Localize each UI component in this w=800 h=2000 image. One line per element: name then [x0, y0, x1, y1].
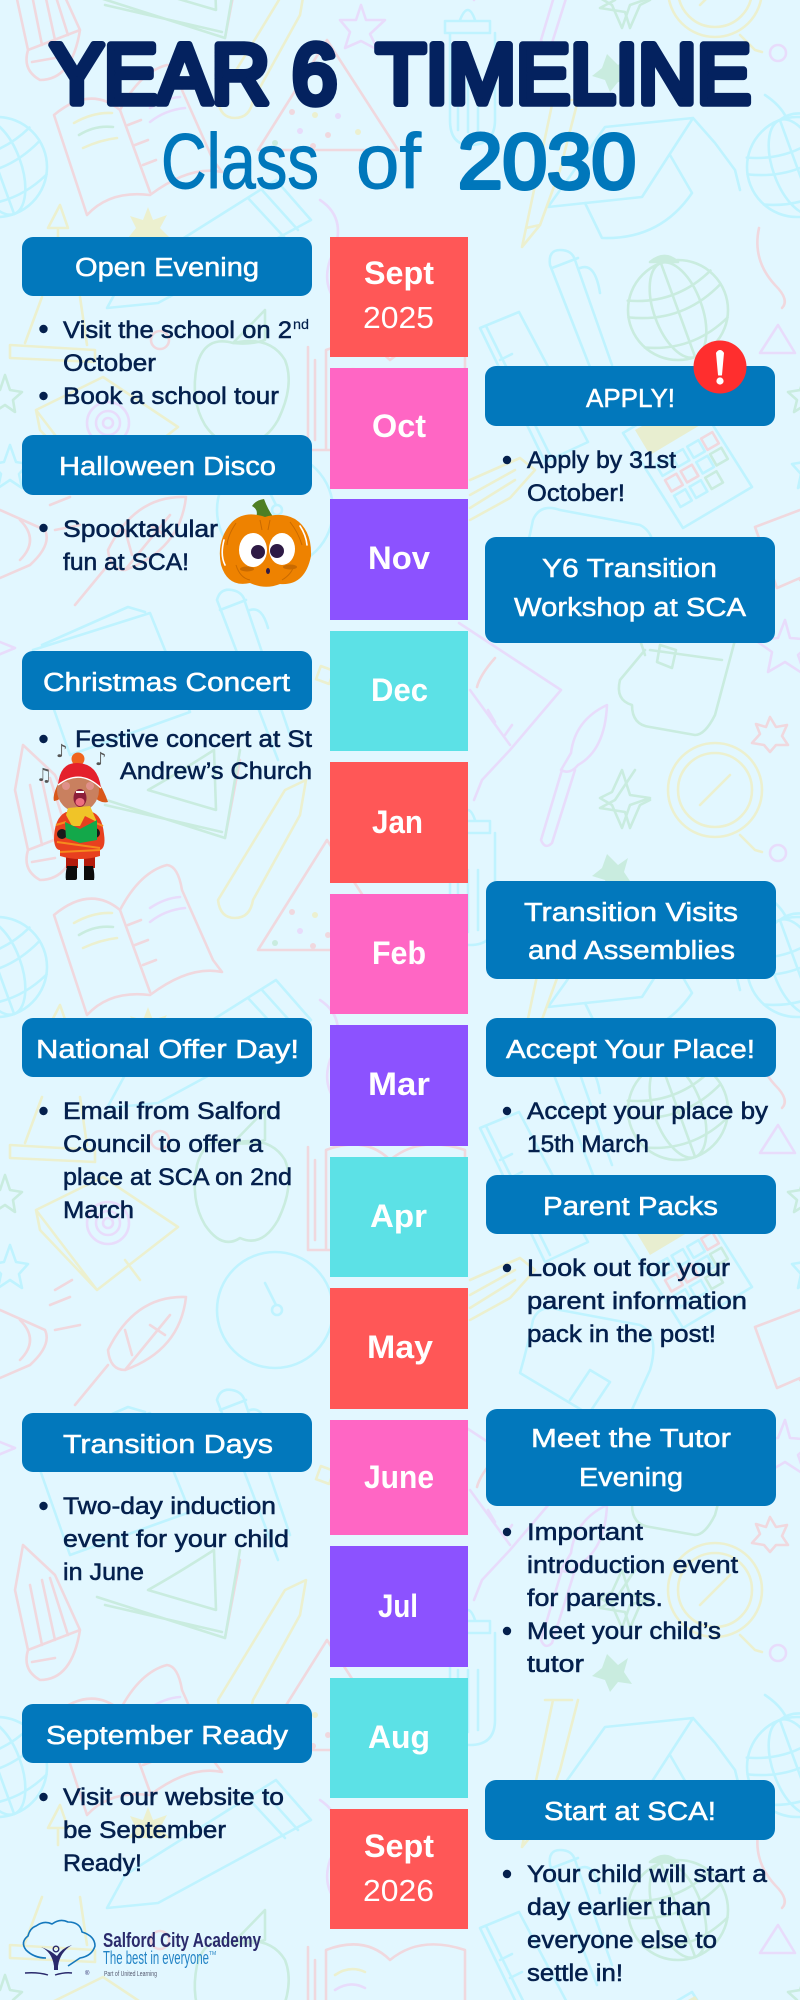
logo: Salford City Academy — [23, 1920, 262, 1978]
panel: start at sca: everyone else to — [527, 1927, 717, 1954]
panel: transition days: in June — [63, 1559, 144, 1586]
month: Apr — [330, 1157, 468, 1277]
month: Sept 2025: 2025 — [363, 300, 434, 335]
panel: meet the tutor evening: Meet the Tutor — [531, 1425, 732, 1453]
panel: open evening: October — [63, 350, 156, 377]
month: Mar — [330, 1025, 468, 1146]
logo: Salford City Academy: ® — [85, 1970, 90, 1977]
panel: start at sca: Start at SCA! — [544, 1798, 716, 1826]
month: Nov: Nov — [368, 540, 430, 576]
panel: parent packs: Parent Packs — [543, 1193, 718, 1221]
month: Sept 2025 — [330, 237, 468, 357]
panel: transition days: Two-day induction — [63, 1493, 276, 1520]
panel: transition visits — [486, 881, 776, 979]
panel: meet the tutor evening: introduction event — [527, 1552, 738, 1579]
month: Feb: Feb — [372, 935, 426, 971]
panel: christmas concert: Andrew’s Church — [120, 758, 312, 785]
icon: carol singer: ♫ — [36, 765, 52, 786]
panel: september ready: Visit our website to — [63, 1784, 284, 1811]
panel: national offer day: Council to offer a — [63, 1131, 263, 1158]
heading: year 6 timeline: YEAR 6 — [50, 27, 337, 121]
panel: meet the tutor evening: Important — [527, 1519, 643, 1546]
panel: accept your place: 15th March — [527, 1131, 649, 1158]
logo: Salford City Academy: Salford City Academy — [103, 1930, 262, 1952]
month: Jul — [330, 1546, 468, 1667]
panel: christmas concert: Festive concert at St — [75, 726, 312, 753]
panel: september ready — [22, 1704, 312, 1877]
panel: national offer day: Email from Salford — [63, 1098, 281, 1125]
panel: september ready: September Ready — [46, 1722, 288, 1750]
panel: apply: Apply by 31st — [527, 447, 676, 474]
panel: transition visits: and Assemblies — [528, 937, 735, 965]
logo: Salford City Academy: TM — [209, 1951, 216, 1957]
month: June — [330, 1420, 468, 1535]
title — [50, 27, 751, 205]
panel: y6 transition workshop: Y6 Transition — [542, 555, 717, 583]
panel: parent packs: parent information — [527, 1288, 747, 1315]
panel: start at sca: Your child will start a — [527, 1861, 767, 1888]
month: Sept 2026 — [330, 1809, 468, 1929]
panel: september ready: be September — [63, 1817, 226, 1844]
month: Aug — [330, 1678, 468, 1798]
panel: apply — [485, 366, 775, 507]
month: Sept 2025: Sept — [364, 255, 434, 291]
icon: pumpkin — [220, 499, 311, 587]
heading: year 6 timeline: TIMELINE — [376, 27, 751, 121]
panel: start at sca — [485, 1780, 775, 1987]
panel: meet the tutor evening: for parents. — [527, 1585, 663, 1612]
panel: september ready: Ready! — [63, 1850, 142, 1877]
panel: transition visits: Transition Visits — [524, 899, 738, 927]
subheading: class of 2030: of — [356, 117, 421, 205]
panel: y6 transition workshop: Workshop at SCA — [514, 594, 746, 622]
month: Mar: Mar — [368, 1066, 430, 1102]
panel: halloween disco: Spooktakular — [63, 516, 218, 543]
panel: apply: October! — [527, 480, 625, 507]
month: Feb — [330, 894, 468, 1014]
month: Jan: Jan — [372, 804, 423, 840]
panel: national offer day: National Offer Day! — [36, 1036, 299, 1064]
panel: national offer day: place at SCA on 2nd — [63, 1164, 292, 1191]
panel: accept your place: Accept your place by — [527, 1098, 769, 1125]
panel: open evening: Visit the school on 2 — [63, 317, 292, 344]
month: Apr: Apr — [370, 1198, 427, 1234]
month: Sept 2026: 2026 — [363, 1873, 434, 1908]
month: Nov — [330, 499, 468, 620]
panel: open evening: Open Evening — [75, 254, 259, 282]
panel: open evening: nd — [293, 316, 309, 332]
icon: carol singer — [36, 741, 108, 880]
panel: meet the tutor evening — [486, 1409, 776, 1678]
month: May: May — [367, 1329, 433, 1365]
month: May — [330, 1288, 468, 1409]
subheading: class of 2030: Class — [161, 117, 319, 205]
month: Jan — [330, 762, 468, 883]
panel: national offer day: March — [63, 1197, 134, 1224]
month: Oct: Oct — [372, 408, 426, 444]
panel: christmas concert — [22, 651, 312, 785]
panel: meet the tutor evening: Evening — [579, 1464, 683, 1492]
panel: halloween disco: fun at SCA! — [63, 549, 189, 576]
panel: halloween disco — [22, 435, 312, 576]
month: Sept 2026: Sept — [364, 1828, 434, 1864]
panel: meet the tutor evening: Meet your child’s — [527, 1618, 721, 1645]
panel: open evening — [22, 237, 312, 410]
panel: y6 transition workshop — [485, 537, 775, 643]
panel: open evening: Book a school tour — [63, 383, 279, 410]
panel: national offer day — [22, 1018, 312, 1224]
panel: parent packs: Look out for your — [527, 1255, 730, 1282]
logo: Salford City Academy: Part of United Learning — [104, 1971, 157, 1978]
logo: Salford City Academy: The best in everyone — [103, 1948, 209, 1968]
panel: parent packs — [486, 1175, 776, 1348]
panel: meet the tutor evening: tutor — [527, 1651, 584, 1678]
month: Oct — [330, 368, 468, 489]
icon: alert exclamation — [694, 340, 746, 394]
panel: transition days: Transition Days — [63, 1431, 273, 1459]
panel: apply: APPLY! — [586, 385, 675, 413]
panel: christmas concert: Christmas Concert — [43, 669, 290, 697]
heading: year 6 timeline — [50, 27, 751, 121]
month: Dec: Dec — [371, 672, 428, 708]
month: Jul: Jul — [378, 1588, 418, 1624]
panel: halloween disco: Halloween Disco — [59, 453, 276, 481]
panel: transition days: event for your child — [63, 1526, 289, 1553]
timeline months — [330, 237, 468, 1929]
icon: carol singer: ♪ — [95, 749, 106, 770]
panel: start at sca: settle in! — [527, 1960, 623, 1987]
subheading: class of 2030: 2030 — [458, 117, 636, 205]
subheading: class of 2030 — [161, 117, 636, 205]
panel: accept your place — [486, 1018, 776, 1158]
month: Dec — [330, 631, 468, 751]
month: June: June — [364, 1459, 434, 1495]
month: Aug: Aug — [368, 1719, 430, 1755]
panel: accept your place: Accept Your Place! — [506, 1036, 755, 1064]
panel: parent packs: pack in the post! — [527, 1321, 716, 1348]
icon: carol singer: ♪ — [56, 741, 68, 762]
panel: start at sca: day earlier than — [527, 1894, 711, 1921]
panel: transition days — [22, 1413, 312, 1586]
